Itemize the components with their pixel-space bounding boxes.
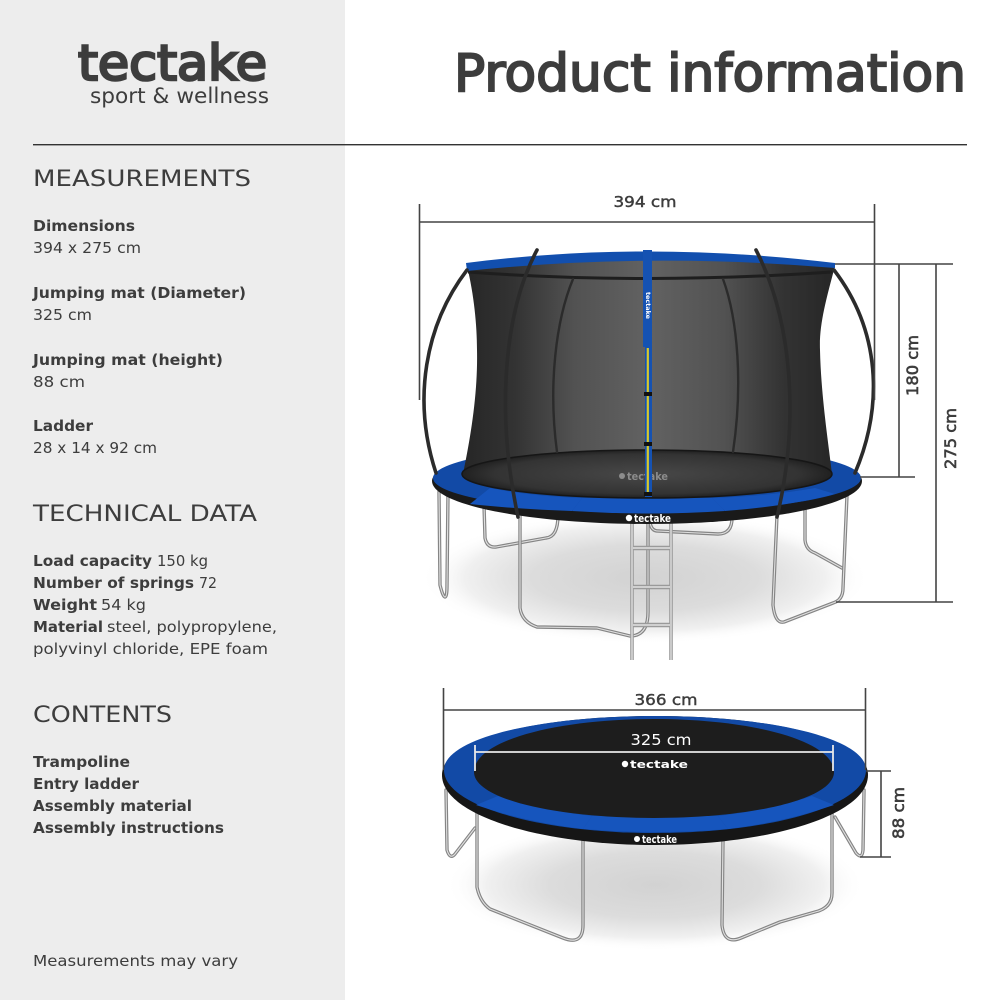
dimension: 88 cm height: 88 cm: [889, 787, 908, 839]
spec list: technical data: Load capacity: [33, 552, 152, 570]
panel: technical data: [32, 502, 277, 658]
list: contents: [33, 753, 224, 837]
dimension: 88 cm height: [860, 771, 908, 857]
title: Product information: [454, 44, 966, 104]
list: contents: Trampoline: [33, 753, 130, 771]
spec: jumping mat diameter: 325 cm: [33, 306, 92, 324]
list: contents: Assembly instructions: [33, 819, 224, 837]
spec: jumping mat height: [32, 351, 223, 391]
inner poles: [553, 279, 738, 452]
ladder: [632, 518, 671, 660]
centre strap: tectake: [644, 292, 651, 319]
padding panels: [470, 488, 835, 514]
centre strap: [643, 250, 652, 497]
dimension: 180 cm net height: 180 cm: [903, 335, 922, 396]
dimension: 325 cm mat diameter: [475, 731, 833, 771]
spec: dimensions: [33, 217, 141, 257]
ground shadow: [420, 512, 870, 644]
skirt logo: tectake: [642, 833, 677, 846]
spec list: technical data: [33, 552, 277, 658]
mat logo: tectake: [630, 758, 688, 771]
blue padding: [433, 444, 861, 512]
spec: jumping mat diameter: Jumping mat (Diameter): [32, 284, 246, 302]
skirt logo: [626, 512, 671, 525]
left sidebar panel: [0, 0, 345, 1000]
spec: ladder: [33, 417, 157, 457]
spec list: technical data: 150 kg: [157, 552, 208, 570]
spec list: technical data: steel, polypropylene,: [107, 618, 277, 636]
skirt logo: tectake: [634, 512, 671, 525]
dimension: 275 cm total height: [836, 264, 960, 602]
dimension: 366 cm width: [443, 688, 866, 770]
dimension: 325 cm mat diameter: 325 cm: [630, 731, 692, 749]
dimension: 394 cm width: [420, 193, 875, 400]
list: contents: Entry ladder: [33, 775, 139, 793]
dimension: 394 cm width: 394 cm: [614, 193, 676, 211]
spec list: technical data: polyvinyl chloride, EPE foam: [33, 640, 268, 658]
legs: [446, 790, 864, 940]
heading: measurements: MEASUREMENTS: [33, 167, 251, 192]
spec: dimensions: Dimensions: [33, 217, 135, 235]
dimension: 180 cm net height: [835, 264, 953, 477]
blue padding: [444, 716, 866, 833]
jumping mat: [462, 450, 832, 498]
spec list: technical data: 72: [199, 574, 217, 592]
spec: ladder: Ladder: [33, 417, 93, 435]
mat logo: tectake: [627, 470, 668, 483]
panel: contents: [33, 703, 224, 837]
heading: contents: CONTENTS: [33, 703, 172, 728]
panel: measurements: [32, 167, 251, 457]
net belt: [468, 272, 832, 278]
top rim: [466, 252, 835, 271]
padding panels: [476, 796, 834, 832]
frame skirt: [442, 716, 868, 845]
brand logo: sport & wellness: [90, 84, 269, 108]
safety net: [463, 254, 835, 474]
brand logo: tectake: [78, 35, 267, 92]
legs: [439, 492, 847, 636]
spec list: technical data: Weight: [33, 596, 98, 614]
spec: dimensions: 394 x 275 cm: [33, 239, 141, 257]
outer poles: [424, 250, 873, 517]
dimension: 275 cm total height: 275 cm: [941, 408, 960, 469]
jumping mat: [474, 719, 834, 818]
heading: technical data: TECHNICAL DATA: [32, 502, 257, 527]
spec list: technical data: Material: [33, 618, 103, 636]
footnote: Measurements may vary: [33, 952, 238, 970]
spec: jumping mat height: Jumping mat (height): [32, 351, 223, 369]
spec list: technical data: 54 kg: [101, 596, 146, 614]
list: contents: Assembly material: [33, 797, 192, 815]
frame skirt: [432, 444, 862, 524]
dimension: 366 cm width: 366 cm: [634, 691, 698, 709]
illustration: trampoline without net: [442, 716, 868, 951]
spec list: technical data: Number of springs: [33, 574, 194, 592]
illustration: trampoline with safety net: [420, 250, 873, 660]
spec: jumping mat height: 88 cm: [33, 373, 85, 391]
spec: jumping mat diameter: [32, 284, 246, 324]
skirt logo: [634, 833, 677, 846]
ground shadow: [445, 819, 865, 951]
spec: ladder: 28 x 14 x 92 cm: [33, 439, 157, 457]
